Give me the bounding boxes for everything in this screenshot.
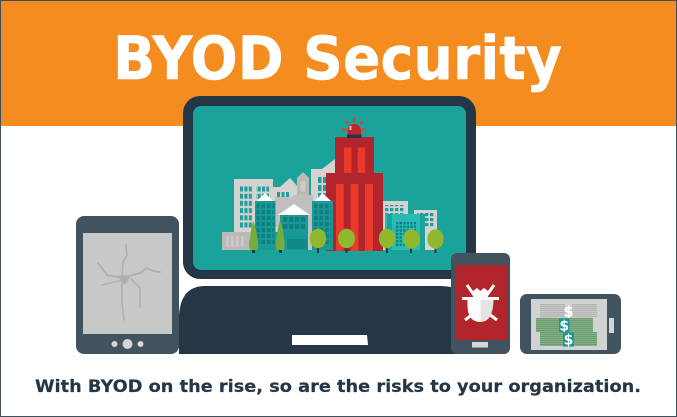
laptop bezel bbox=[183, 96, 476, 279]
green bill stack middle: $ bbox=[559, 318, 569, 334]
trees bbox=[249, 221, 444, 253]
trackpad bbox=[292, 335, 368, 345]
tablet with cracked screen bbox=[76, 216, 179, 354]
phone body bbox=[451, 253, 510, 354]
gray bill stack: $ bbox=[563, 304, 574, 320]
phone screen bbox=[531, 299, 607, 350]
teal building right bbox=[385, 214, 425, 250]
header band bbox=[0, 0, 677, 126]
red alert tower bbox=[326, 137, 383, 251]
teal tower center bbox=[278, 204, 310, 250]
alarm siren bbox=[342, 118, 366, 138]
laptop screen bbox=[193, 106, 466, 270]
bug icon bbox=[462, 285, 499, 322]
tablet screen bbox=[83, 233, 172, 334]
tagline: With BYOD on the rise, so are the risks to your organization. bbox=[35, 377, 641, 397]
teal tower right bbox=[312, 193, 333, 250]
laptop base bbox=[179, 286, 473, 354]
tablet body bbox=[76, 216, 179, 354]
phone with malware bug bbox=[451, 253, 510, 354]
teal tower left bbox=[255, 193, 276, 250]
city skyline bbox=[222, 118, 444, 253]
background gray buildings bbox=[222, 159, 437, 250]
green bill stack lower: $ bbox=[564, 332, 573, 348]
phone body bbox=[520, 294, 621, 354]
phone screen bbox=[455, 265, 507, 340]
title: BYOD Security bbox=[113, 24, 562, 94]
laptop bbox=[179, 96, 476, 354]
screen cracks bbox=[98, 245, 160, 320]
side button bbox=[609, 318, 614, 333]
landscape phone with money bbox=[520, 294, 621, 354]
home button bbox=[472, 342, 488, 348]
tablet buttons bbox=[112, 339, 144, 349]
